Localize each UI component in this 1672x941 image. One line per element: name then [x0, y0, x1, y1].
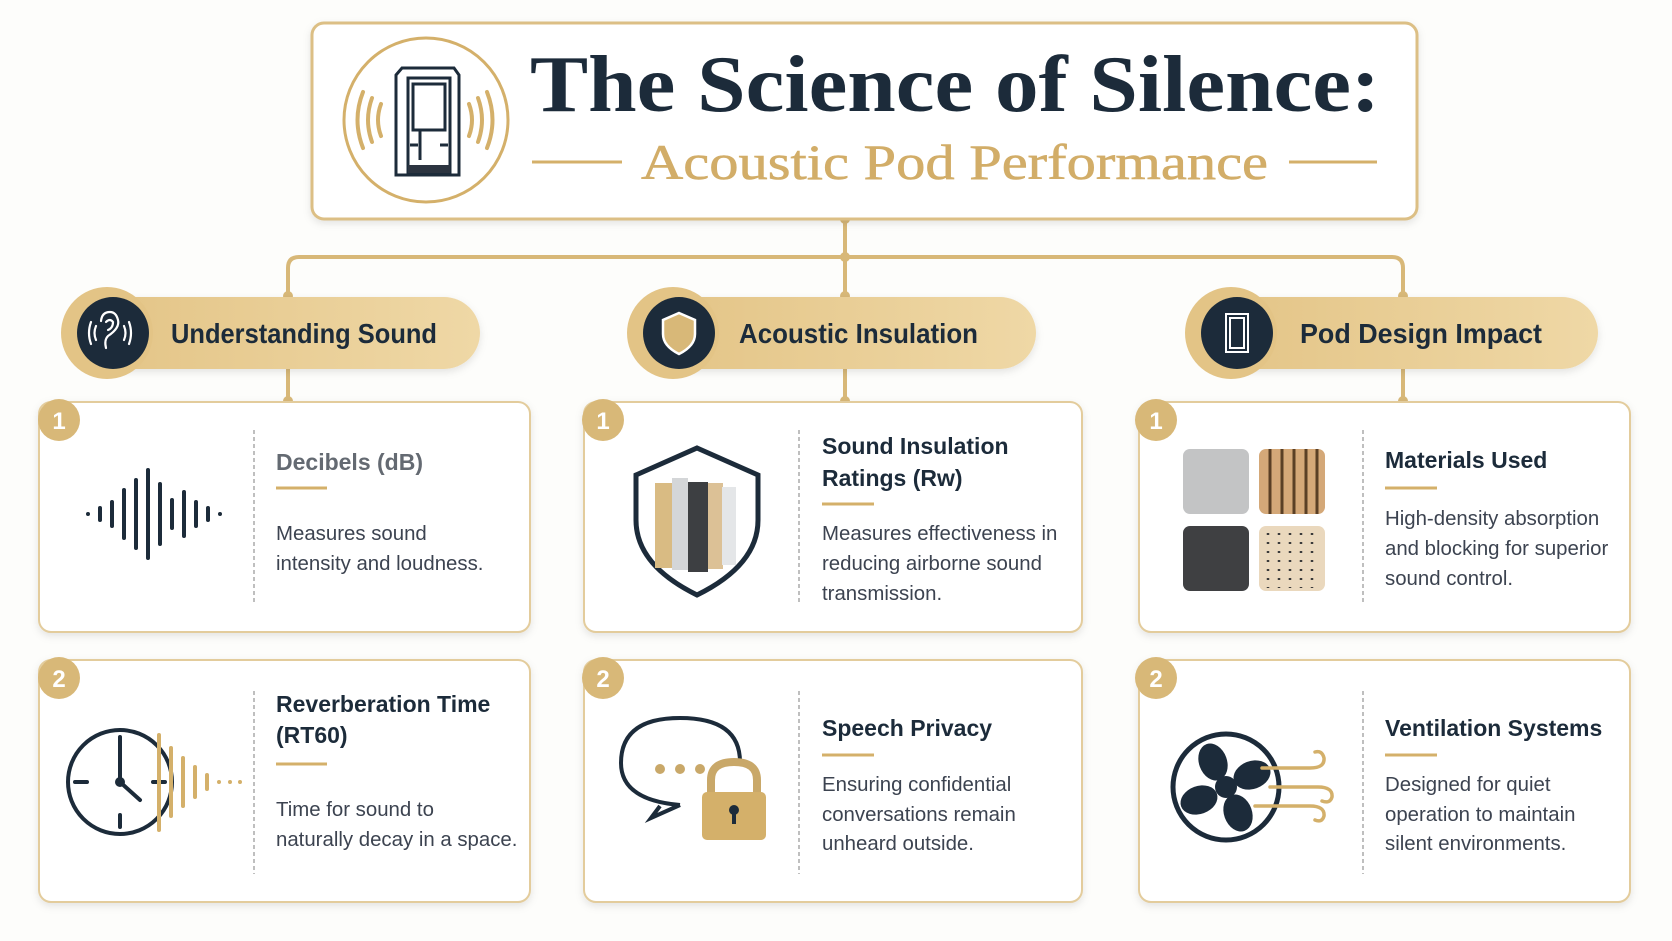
card: Decibels — [38, 399, 530, 632]
title text: The Science of Silence: — [530, 41, 1380, 129]
card: Ventilation — [1135, 657, 1630, 902]
pill: Acoustic Insulation: Acoustic Insulation — [739, 318, 978, 349]
pill: Pod Design Impact — [1185, 287, 1598, 379]
card: Speech Privacy: unheard outside. — [822, 833, 974, 855]
card: Ventilation: operation to maintain — [1385, 804, 1575, 826]
card: Decibels: 1 — [52, 408, 66, 435]
card: Materials Used — [1135, 399, 1630, 632]
card: Reverberation — [38, 657, 530, 902]
card: Reverberation: 2 — [52, 666, 66, 693]
card: Ventilation: 2 — [1149, 666, 1163, 693]
icon: material swatches — [1183, 449, 1325, 591]
card: Sound Insulation Ratings: reducing airborne sound — [822, 553, 1042, 575]
icon: shield — [663, 313, 695, 354]
card: Speech Privacy: conversations remain — [822, 804, 1016, 826]
icon: pod with sound waves — [344, 38, 508, 202]
card: Reverberation: naturally decay in a space. — [276, 829, 517, 851]
card: Ventilation: Designed for quiet — [1385, 774, 1551, 796]
card: Materials Used: 1 — [1149, 408, 1163, 435]
subtitle: Acoustic Pod Performance — [641, 134, 1268, 190]
card: Reverberation: Time for sound to — [276, 799, 434, 821]
card: Speech Privacy: 2 — [596, 666, 610, 693]
icon: speech bubble with lock — [621, 718, 766, 840]
card: Materials Used: Materials Used — [1385, 447, 1547, 473]
card: Decibels: Decibels (dB) — [276, 449, 423, 475]
card: Sound Insulation Ratings: Measures effectiveness in — [822, 523, 1057, 545]
icon: clock with decay — [68, 730, 240, 834]
card: Ventilation: silent environments. — [1385, 833, 1566, 855]
card: Sound Insulation Ratings: Sound Insulation — [822, 433, 1009, 459]
card: Speech Privacy — [582, 657, 1082, 902]
card: Sound Insulation Ratings: Ratings (Rw) — [822, 465, 963, 491]
card: Reverberation: (RT60) — [276, 722, 348, 748]
icon: pod — [1226, 314, 1248, 352]
card: Reverberation: Reverberation Time — [276, 691, 490, 717]
card: Speech Privacy: Speech Privacy — [822, 715, 992, 741]
icon: fan with airflow — [1173, 734, 1332, 840]
card: Speech Privacy: Ensuring confidential — [822, 774, 1011, 796]
card: Sound Insulation Ratings: 1 — [596, 408, 610, 435]
card: Materials Used: sound control. — [1385, 568, 1513, 590]
card: Ventilation: Ventilation Systems — [1385, 715, 1602, 741]
icon: waveform — [88, 470, 220, 558]
pill: Understanding Sound — [61, 287, 480, 379]
card: Materials Used: High-density absorption — [1385, 508, 1599, 530]
title panel — [312, 23, 1417, 219]
card: Materials Used: and blocking for superior — [1385, 538, 1609, 560]
card: Sound Insulation Ratings — [582, 399, 1082, 632]
card: Decibels: Measures sound — [276, 523, 427, 545]
connectors — [283, 214, 1408, 406]
icon: shield with layers — [636, 448, 758, 595]
card: Decibels: intensity and loudness. — [276, 553, 483, 575]
card: Sound Insulation Ratings: transmission. — [822, 583, 942, 605]
icon: ear — [89, 312, 131, 348]
pill: Acoustic Insulation — [627, 287, 1036, 379]
pill: Pod Design Impact: Pod Design Impact — [1300, 318, 1542, 349]
pill: Understanding Sound: Understanding Sound — [171, 318, 437, 349]
